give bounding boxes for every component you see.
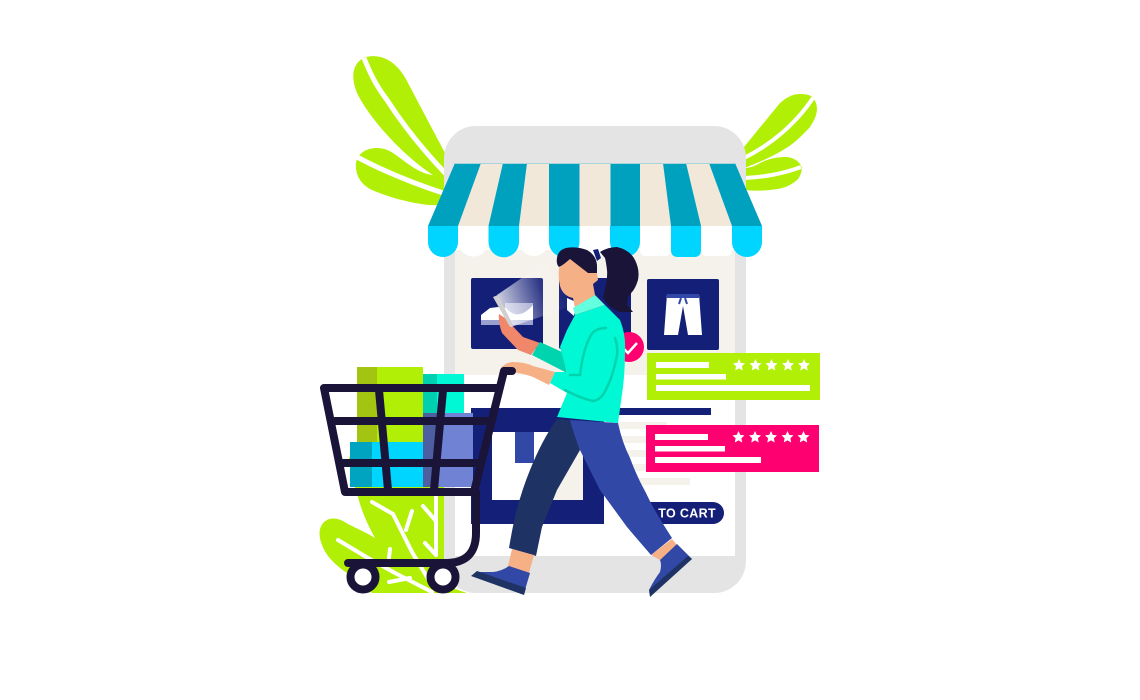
person: hair tie: [593, 249, 601, 261]
phone body: [444, 126, 746, 593]
shopping cart: [324, 371, 512, 590]
plant: top right leaves: [744, 94, 817, 191]
person: front ankle: [651, 539, 677, 560]
person: front leg: [570, 420, 672, 555]
icon: pink check badge: [614, 332, 644, 362]
person: lower hand and arm: [501, 362, 555, 385]
cart: right wheel: [430, 564, 456, 590]
shopping bags in cart: [350, 367, 473, 487]
person: hair: [557, 247, 597, 273]
person: phone light beam: [497, 262, 572, 327]
cart: left wheel: [350, 564, 376, 590]
product tile: shirt: [559, 278, 631, 349]
review card: green: [647, 353, 820, 400]
product image: [471, 408, 604, 524]
person: back shoe: [477, 566, 530, 590]
awning: [428, 163, 762, 257]
cart: rails: [335, 390, 491, 490]
person: sweater folds: [565, 328, 617, 401]
product detail: description lines: [600, 422, 690, 485]
product detail: heading bar: [600, 408, 711, 415]
product tile: trousers: [647, 279, 719, 350]
cart: lower frame: [348, 492, 476, 563]
cart: basket frame: [324, 371, 512, 492]
button: add to cart: [622, 502, 724, 524]
person: back ankle: [508, 549, 534, 573]
awning: valance scallops: [428, 226, 762, 257]
review card: pink: [646, 425, 819, 472]
button: add to cart: ADD TO CART: [626, 506, 716, 520]
plant: top left leaves: [353, 56, 446, 205]
person: front shoe: [649, 544, 692, 590]
person: sweater body: [550, 305, 625, 423]
stars: pink card: [732, 431, 810, 442]
person: back leg: [509, 419, 580, 556]
stars: green card: [733, 359, 810, 370]
person: raised sleeve: [532, 342, 567, 373]
person: front shoe sole: [649, 556, 692, 597]
person: neck and face: [559, 258, 598, 308]
person: ponytail: [600, 247, 639, 312]
plant: bottom left leaves: [320, 440, 467, 593]
person: collar: [573, 295, 605, 315]
person: back shoe sole: [471, 571, 526, 595]
person: [471, 247, 692, 597]
person: raised forearm: [499, 314, 540, 355]
person: phone in hand: [493, 295, 513, 327]
product tile: shoe: [471, 278, 543, 349]
